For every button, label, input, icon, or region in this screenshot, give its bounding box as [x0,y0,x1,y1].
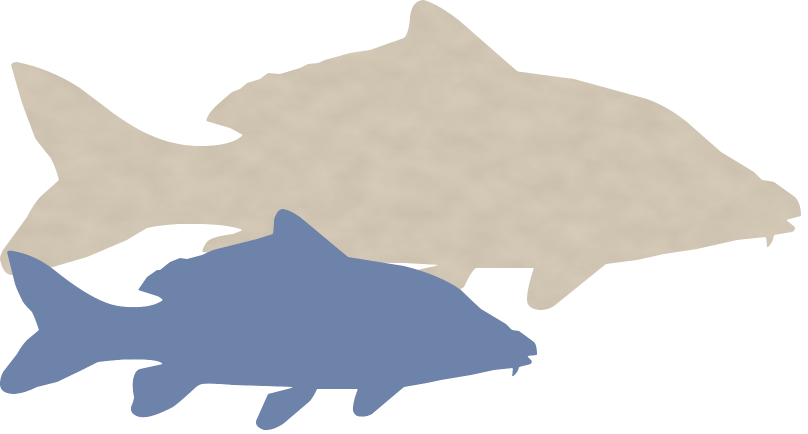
small blue fish silhouette [0,209,537,430]
large tan fish silhouette [0,0,801,310]
